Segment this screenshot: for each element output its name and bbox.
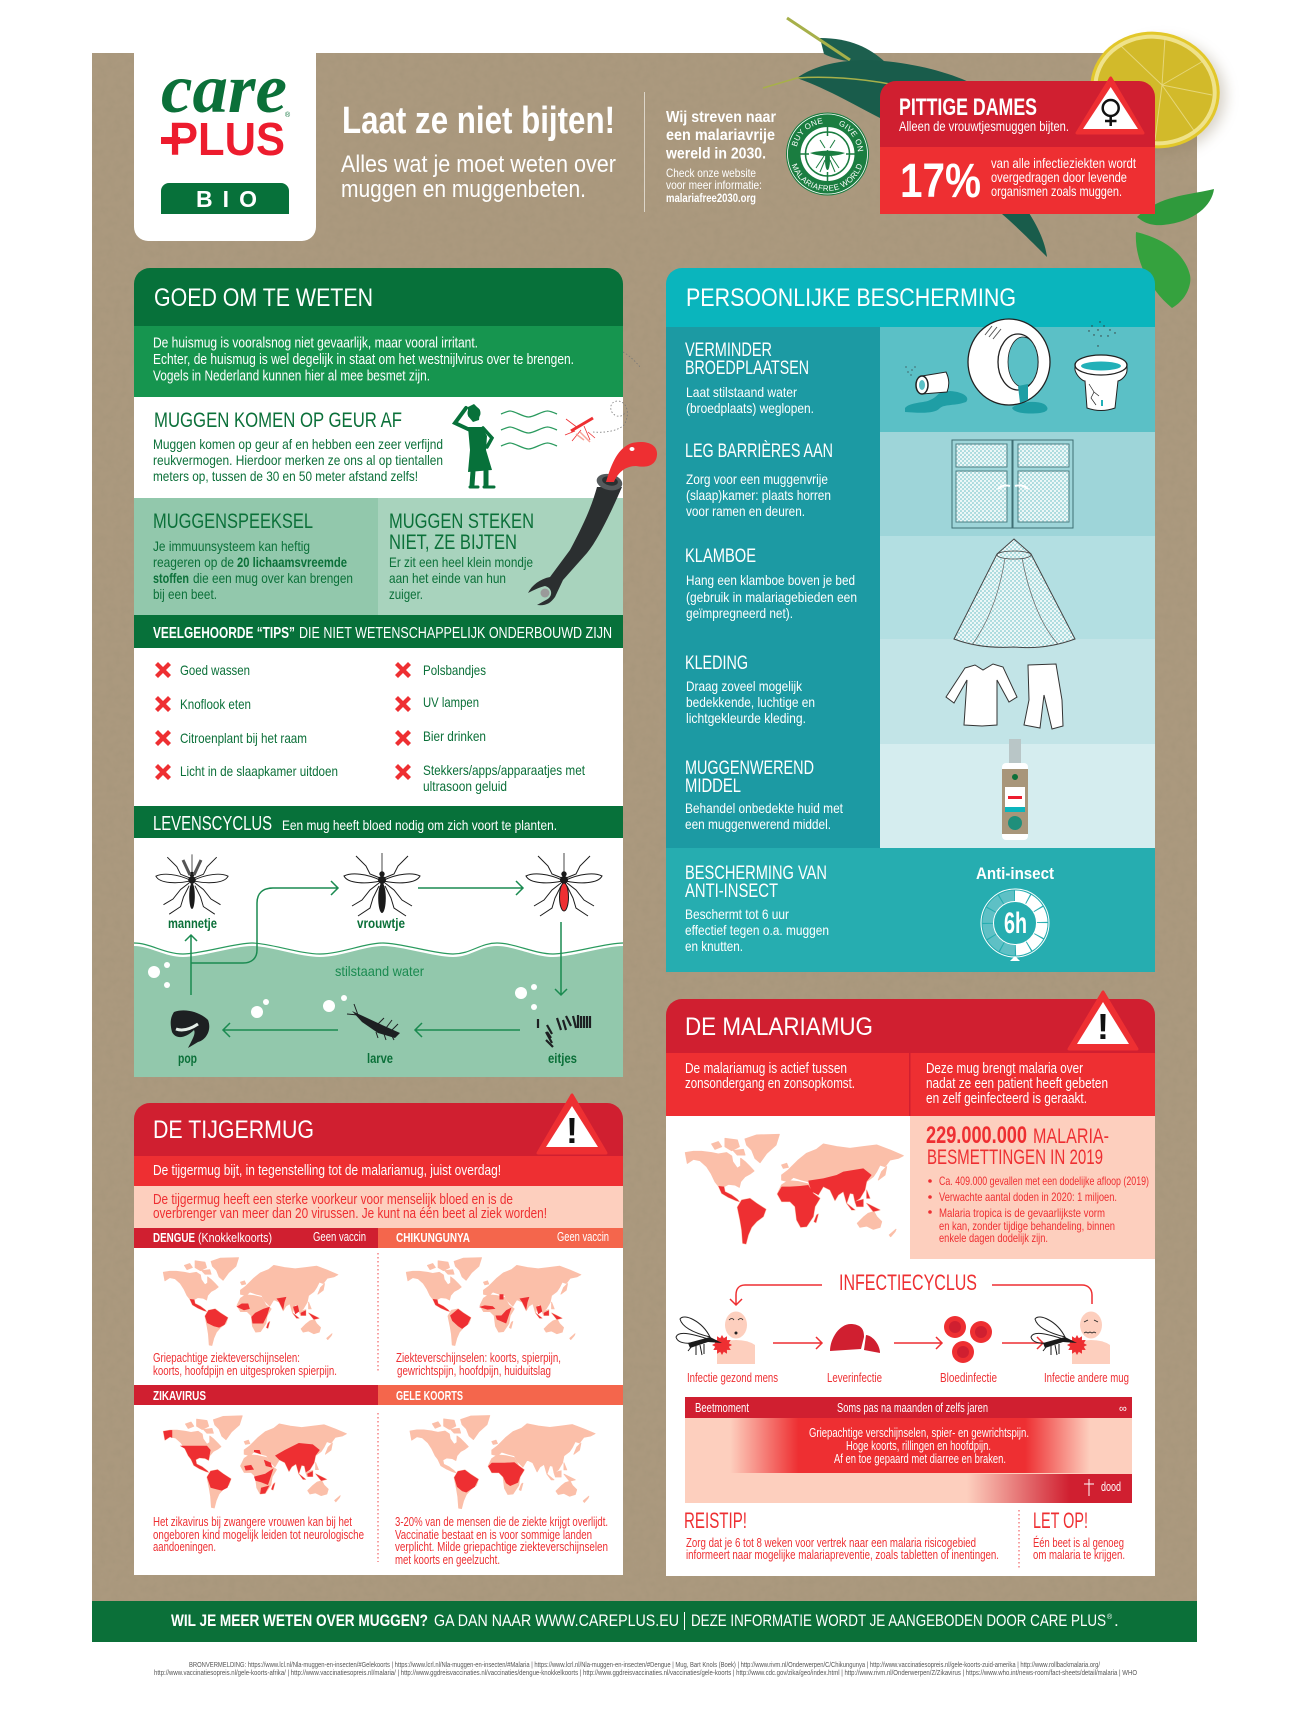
intro columns [666,1053,1155,1116]
icon: six hour clock: 6h [1004,907,1027,940]
water [134,946,623,1077]
tips text: UV lampen [423,694,479,710]
tip: reistip: informeert naar mogelijke malariapreventie, zoals tabletten of inentingen. [686,1548,999,1562]
disease: gele koorts: verplicht. Milde griepachtige ziekteverschijnselen [395,1539,608,1554]
section: bescherming van anti-insect [666,848,1155,972]
icon: blood cells [944,1316,992,1363]
tip: let op [1033,1508,1125,1562]
icon: pupa [171,1010,209,1048]
section: bescherming van anti-insect: Beschermt tot 6 uur [685,906,789,922]
labels [168,915,577,1066]
tip: reistip: Zorg dat je 6 tot 8 weken voor vertrek naar een malaria risicogebied [686,1536,976,1550]
footer bar [92,1601,1197,1642]
labels: vrouwtje [357,915,405,931]
decoration: eucalyptus leaves [763,18,1047,257]
chart: timeline [685,1397,1132,1503]
tips text: Polsbandjes [423,662,486,678]
block: malaria statistics: Verwachte aantal doden in 2020: 1 miljoen. [939,1190,1117,1204]
block: malaria statistics: enkele dagen dodelijk zijn. [939,1231,1048,1245]
heading: DE MALARIAMUG [685,1013,873,1041]
chart: timeline: Soms pas na maanden of zelfs jaren [837,1401,988,1415]
item: klamboe: geïmpregneerd net). [686,605,793,621]
statistic description: van alle infectieziekten wordt [991,155,1136,171]
footer bar: WIL JE MEER WETEN OVER MUGGEN? [171,1611,428,1630]
item: kleding: lichtgekleurde kleding. [686,710,806,726]
map: zikavirus [163,1416,346,1508]
labels: Leverinfectie [827,1370,882,1385]
icon: six hour clock [981,889,1049,961]
icon: malariafree badge [786,112,869,196]
source references: BRONVERMELDING: https://www.lcl.nl/Nla-muggen-en-insecten/#Gelekoorts | https://www.lcrl.nl/Nla-muggen-en-insecten/#Malaria | https://www.lcrl.nl/Nla-muggen-en-insecten/#Dengue | Mug, Bart Knols (Boek) | http://www.rivm.nl/Onderwerpen/C/Chikungunya | http://www.vaccinatiesopreis.nl/gele-koorts-zuid-amerika | http://www.rollbackmalaria.org/ [189,1662,1100,1669]
intro text: Echter, de huismug is wel degelijk in staat om het westnijlvirus over te brengen. [153,352,574,368]
item: kleding [685,653,815,726]
item: klamboe [685,546,857,621]
block: muggen steken niet: MUGGEN STEKEN [389,510,534,533]
panel: persoonlijke bescherming [666,268,1155,972]
icon: bitten healthy person [676,1312,755,1364]
block: muggenspeeksel: bij een beet. [153,586,217,602]
item: muggenwerend middel: MIDDEL [685,776,741,797]
disease: gele koorts: GELE KOORTS [396,1388,463,1403]
item: verminder broedplaatsen: (broedplaats) weglopen. [686,400,814,416]
arrows [185,881,567,1037]
malaria free statement: voor meer informatie: [666,178,762,192]
intro text: Vogels in Nederland kunnen hier al mee besmet zijn. [153,368,430,384]
source references: http://www.vaccinatiesopreis.nl/gele-koorts-afrika/ | http://www.vaccinatiesopreis.nl/malaria/ | http://www.ggdreisvaccinaties.nl/vaccinaties/dengue-knokkelkoorts | http://www.ggdreisvaccinaties.nl/vaccinaties/gele-koorts | http://www.cdc.gov/zika/geo/index.html | http://www.rivm.nl/Onderwerpen/Z/Zikavirus | https://www.who.int/news-room/fact-sheets/detail/malaria | WHO [154,1670,1137,1677]
section: bescherming van anti-insect: ANTI-INSECT [685,881,778,902]
block: malaria statistics: BESMETTINGEN IN 2019 [927,1146,1103,1169]
tips text: Licht in de slaapkamer uitdoen [180,763,338,779]
pink intro: overbrenger van meer dan 20 virussen. Je kunt na één beet al ziek worden! [153,1205,547,1222]
block: muggen steken niet [378,498,623,615]
intro columns: Deze mug brengt malaria over [926,1061,1083,1077]
item: leg barrieres aan [685,441,833,519]
registered mark: ® [285,111,291,119]
icon: infected person [1031,1312,1110,1364]
icon: warning triangle: ! [1097,1006,1109,1047]
heading: DE TIJGERMUG [153,1116,314,1144]
kraft paper background [92,53,1197,1603]
disease: dengue: Geen vaccin [313,1229,366,1244]
subheading bar: De tijgermug bijt, in tegenstelling tot de malariamug, juist overdag! [153,1162,501,1179]
disease: zikavirus: ongeboren kind mogelijk leiden tot neurologische [153,1527,364,1542]
tip: let op: om malaria te krijgen. [1033,1548,1125,1562]
panel: de malariamug [666,992,1155,1576]
labels: larve [367,1050,393,1066]
item: verminder broedplaatsen: BROEDPLAATSEN [685,358,809,379]
illustration: clothes [946,664,1063,729]
disease: zikavirus: Het zikavirus bij zwangere vrouwen kan bij het [153,1514,352,1529]
tips text: Citroenplant bij het raam [180,730,307,746]
disease: zikavirus [134,1385,378,1554]
bubbles [148,962,537,1018]
item: verminder broedplaatsen [685,340,814,416]
item: leg barrieres aan: LEG BARRIÈRES AAN [685,441,833,462]
tips text: ultrasoon geluid [423,778,507,794]
chart: timeline: Beetmoment [695,1401,749,1415]
tip: let op: Één beet is al genoeg [1033,1535,1124,1550]
icon: malariafree badge: MALARIAFREE WORLD [792,163,862,192]
map: malaria [685,1134,903,1244]
icons: red crosses [155,662,411,780]
malaria free statement [665,109,776,205]
block: malaria statistics [910,1116,1155,1259]
labels: eitjes [548,1050,577,1066]
item: kleding: KLEDING [685,653,748,674]
block: muggen komen op geur af: meters op, tussen de 30 en 50 meter afstand zelfs! [153,468,418,484]
item: verminder broedplaatsen: VERMINDER [685,340,772,361]
labels: Infectie gezond mens [687,1370,778,1385]
subheading bar [134,1156,623,1186]
statistic description [991,155,1136,199]
disease: gele koorts: 3-20% van de mensen die de ziekte krijgt overlijdt. [395,1514,608,1529]
disease: chikungunya: gewrichtspijn, hoofdpijn, huiduitslag [397,1363,551,1378]
flight path [593,352,640,432]
intro columns: nadat ze een patient heeft gebeten [926,1076,1108,1092]
footer bar: DEZE INFORMATIE WORDT JE AANGEBODEN DOOR CARE PLUS [691,1611,1106,1630]
section: infectiecyclus [666,1259,1155,1576]
illustration: window screen [952,440,1073,528]
item: leg barrieres aan: (slaap)kamer: plaats horren [686,487,831,503]
block: muggen steken niet: aan het einde van hun [389,570,506,586]
malaria free statement: Check onze website [666,166,756,180]
map: chikungunya [406,1258,581,1345]
footer bar: GA DAN NAAR WWW.CAREPLUS.EU [434,1611,679,1630]
icon: warning triangle: ! [566,1110,578,1151]
malaria free statement: malariafree2030.org [666,191,756,205]
BIO label: BIO [196,186,257,212]
disease: dengue: koorts, hoofdpijn en uitgesproken spierpijn. [153,1363,337,1378]
malaria free statement: Wij streven naar [666,109,776,126]
illustration: breeding places [905,319,1127,413]
chart: timeline: ∞ [1119,1403,1127,1415]
icon: liver [830,1324,880,1353]
intro columns: De malariamug is actief tussen [685,1061,847,1077]
tips text: Goed wassen [180,662,250,678]
panel: de tijgermug [134,1095,623,1575]
block: muggen komen op geur af: reukvermogen. Hierdoor merken ze ons al op tientallen [153,452,443,468]
tips text [180,662,585,794]
logo word: care: care [161,51,287,128]
disease: gele koorts [378,1385,623,1567]
icon: scent waves [501,411,557,449]
disease: dengue: (Knokkelkoorts) [198,1230,272,1245]
icon: female warning triangle [1077,78,1143,133]
BIO label [161,183,289,214]
block: muggen steken niet: zuiger. [389,586,423,602]
disease: gele koorts: Vaccinatie bestaat en is voor sommige landen [395,1527,592,1542]
tips text: Stekkers/apps/apparaatjes met [423,762,585,778]
tip: reistip: REISTIP! [684,1508,747,1533]
statistic description: overgedragen door levende [991,169,1127,185]
icon: warning triangle [1069,992,1137,1049]
section: bescherming van anti-insect: BESCHERMING VAN [685,863,827,884]
block: muggenspeeksel: Je immuunsysteem kan heftig [153,538,310,554]
heading: PITTIGE DAMES [899,94,1037,121]
item: muggenwerend middel: een muggenwerend middel. [685,816,831,832]
block: muggenspeeksel: stoffen [153,570,189,586]
item: leg barrieres aan: Zorg voor een muggenvrije [686,471,828,487]
section: bescherming van anti-insect: effectief tegen o.a. muggen [685,922,829,938]
tips text: Knoflook eten [180,696,251,712]
icon: female mosquito [344,853,420,916]
block: malaria statistics: Ca. 409.000 gevallen met een dodelijke afloop (2019) [939,1174,1149,1188]
malaria free statement: een malariavrije [666,127,775,144]
heading: PERSOONLIJKE BESCHERMING [686,284,1016,312]
icon: malariafree badge: BUY ONE [792,118,823,146]
block: muggen komen op geur af: MUGGEN KOMEN OP GEUR AF [154,409,402,432]
panel: pittige dames [880,78,1155,214]
item: muggenwerend middel: MUGGENWEREND [685,758,814,779]
icon: person silhouette [455,404,494,487]
labels [687,1370,1129,1385]
decoration: lemon slice [1079,20,1231,160]
tip: let op: LET OP! [1033,1508,1088,1533]
intro text: De huismug is vooralsnog niet gevaarlijk, maar vooral irritant. [153,336,478,352]
decoration: green leaves [1132,189,1214,308]
title block [341,100,616,203]
water label: stilstaand water [335,963,424,979]
block: muggenspeeksel: die een mug over kan brengen [193,570,353,586]
illustration: mosquito net [954,539,1075,648]
labels: Bloedinfectie [940,1370,997,1385]
intro columns: en zelf geinfecteerd is geraakt. [926,1091,1087,1107]
pink intro: De tijgermug heeft een sterke voorkeur voor menselijk bloed en is de [153,1191,513,1208]
bar: veelgehoorde tips: VEELGEHOORDE “TIPS” [153,625,295,642]
disease: zikavirus: aandoeningen. [153,1539,216,1554]
item: verminder broedplaatsen: Laat stilstaand water [686,384,797,400]
bar: levenscyclus: Een mug heeft bloed nodig om zich voort te planten. [282,817,557,833]
footer bar: . [1114,1611,1119,1630]
disease: dengue: DENGUE [153,1230,195,1245]
disease: dengue [134,1228,378,1378]
block: muggenspeeksel [134,498,378,615]
icon: eggs [538,1015,590,1047]
icon: blood fed mosquito [526,853,602,916]
intro text [134,326,623,397]
disease: chikungunya: Ziekteverschijnselen: koorts, spierpijn, [396,1350,561,1365]
bar: veelgehoorde tips: DIE NIET WETENSCHAPPELIJK ONDERBOUWD ZIJN [299,625,612,642]
block: muggen steken niet: NIET, ZE BIJTEN [389,531,517,554]
pink intro [134,1186,623,1228]
section: bescherming van anti-insect: en knutten. [685,938,743,954]
disease: chikungunya: CHIKUNGUNYA [396,1230,470,1245]
logo word: PLUS: PLUS [169,113,285,165]
tips text: Bier drinken [423,728,486,744]
subheading: Alleen de vrouwtjesmuggen bijten. [899,118,1069,134]
disease: gele koorts: met koorts en geelzucht. [395,1552,500,1567]
item: klamboe: Hang een klamboe boven je bed [686,572,855,588]
title block: muggen en muggenbeten. [341,176,586,203]
icon: proboscis [528,442,657,605]
icon: red mosquito [565,418,595,442]
disease: zikavirus: ZIKAVIRUS [153,1388,206,1403]
map: gele koorts [410,1416,595,1509]
icon: warning triangle [538,1095,606,1153]
panel: goed om te weten [134,268,657,1077]
item: muggenwerend middel [685,758,843,832]
block: muggen komen op geur af [134,352,640,498]
intro columns: zonsondergang en zonsopkomst. [685,1076,855,1092]
block: muggen komen op geur af: Muggen komen op geur af en hebben een zeer verfijnd [153,436,443,452]
bar: veelgehoorde tips [134,615,623,648]
label: anti-insect: Anti-insect [976,864,1054,883]
labels: Infectie andere mug [1044,1370,1129,1385]
illustration: repellent bottle [1002,739,1028,840]
icon: male mosquito [156,854,228,914]
block: muggenspeeksel: 20 lichaamsvreemde [237,554,347,570]
list: ineffective tips [134,648,623,806]
icon: larva [347,1004,400,1040]
bar: levenscyclus [134,806,623,838]
disease: chikungunya [378,1228,623,1378]
block: muggenspeeksel: MUGGENSPEEKSEL [153,510,313,533]
logo card [134,51,316,241]
labels: pop [178,1050,197,1066]
chart: timeline: Hoge koorts, rillingen en hoofdpijn. [846,1439,991,1453]
item: kleding: Draag zoveel mogelijk [686,678,803,694]
heading: INFECTIECYCLUS [839,1270,977,1295]
footer bar: ® [1107,1613,1113,1621]
heading: GOED OM TE WETEN [154,284,373,312]
chart: timeline: dood [1101,1480,1121,1494]
statistic description: organismen zoals muggen. [991,183,1122,199]
cycle arrows [730,1285,1092,1349]
block: muggen steken niet: Er zit een heel klein mondje [389,554,533,570]
item: klamboe: (gebruik in malariagebieden een [686,589,857,605]
source references [154,1662,1137,1677]
item: leg barrieres aan: voor ramen en deuren. [686,503,805,519]
malaria free statement: wereld in 2030. [665,146,766,162]
item: muggenwerend middel: Behandel onbedekte huid met [685,800,843,816]
chart: timeline: Griepachtige verschijnselen, spier- en gewrichtspijn. [809,1426,1029,1440]
chart: timeline: Af en toe gepaard met diarree en braken. [834,1452,1006,1466]
title block: Laat ze niet bijten! [342,100,615,142]
item: klamboe: KLAMBOE [685,546,756,567]
tip: reistip [684,1508,999,1562]
title block: Alles wat je moet weten over [341,151,616,178]
block: malaria statistics: en kan, zonder tijdige behandeling, binnen [939,1219,1115,1233]
bar: levenscyclus: LEVENSCYCLUS [153,813,272,835]
block: malaria statistics: Malaria tropica is de gevaarlijkste vorm [939,1206,1105,1220]
block: malaria statistics: MALARIA- [1033,1125,1109,1148]
block: muggenspeeksel: reageren op de [153,554,234,570]
disease: dengue: Griepachtige ziekteverschijnselen: [153,1350,300,1365]
item: kleding: bedekkende, luchtige en [686,694,815,710]
labels: mannetje [168,915,217,931]
statistic: 17% [900,155,981,208]
block: malaria statistics: 229.000.000 [926,1122,1027,1149]
disease: chikungunya: Geen vaccin [557,1229,609,1244]
diagram: life cycle [134,838,623,1077]
map: dengue [163,1258,338,1345]
